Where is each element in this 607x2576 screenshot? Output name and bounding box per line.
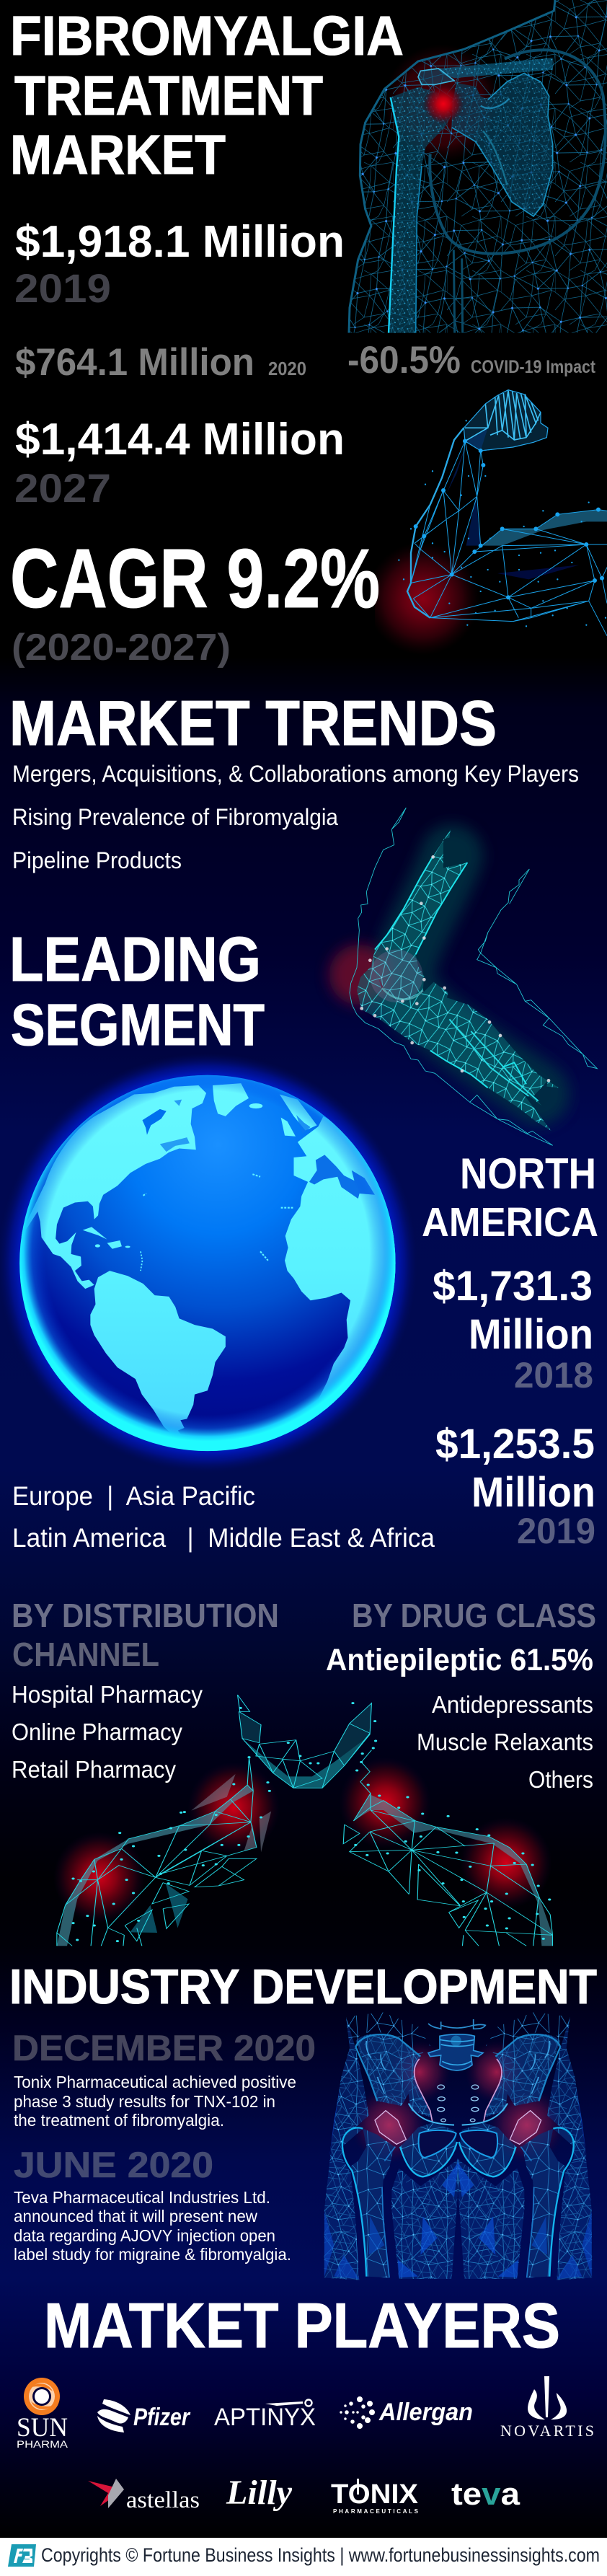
list: distribution channels: Online Pharmacy xyxy=(12,1719,182,1745)
stat: 2020 market size: 2020 xyxy=(268,358,306,379)
illustration: neck and shoulders mesh xyxy=(53,1695,552,1946)
logo: Tonix: PHARMACEUTICALS xyxy=(333,2508,419,2515)
event: December 2020: Tonix Pharmaceutical achieved positive xyxy=(14,2073,296,2091)
stat: 2019 market size: $1,918.1 Million xyxy=(15,217,345,267)
stat: COVID-19 impact: -60.5% xyxy=(347,339,461,381)
list: distribution channels: Hospital Pharmacy xyxy=(12,1681,203,1708)
illustration: shoulder mesh xyxy=(349,0,607,333)
logo: Astellas xyxy=(88,2479,200,2513)
illustration: pelvis mesh xyxy=(324,2012,592,2280)
stat: North America 2018 xyxy=(433,1263,593,1395)
list: distribution channels: Retail Pharmacy xyxy=(12,1756,176,1783)
event: December 2020: DECEMBER 2020 xyxy=(12,2028,316,2068)
region list: Latin America | Middle East & Africa xyxy=(12,1523,435,1553)
event: December 2020: the treatment of fibromyalgia. xyxy=(14,2111,224,2130)
stat: CAGR: (2020-2027) xyxy=(12,627,231,669)
title xyxy=(10,5,404,186)
logo: Sun Pharma: PHARMA xyxy=(17,2438,68,2450)
heading: market trends: MARKET TRENDS xyxy=(9,687,497,759)
stat: 2027 market size: 2027 xyxy=(14,465,111,511)
title: FIBROMYALGIA xyxy=(10,5,404,67)
title: MARKET xyxy=(10,124,226,186)
stat: antiepileptic share: Antiepileptic 61.5% xyxy=(326,1643,593,1677)
stat: CAGR xyxy=(10,531,380,669)
event: June 2020: label study for migraine & fibromyalgia. xyxy=(14,2245,291,2264)
stat: North America 2018: Million xyxy=(469,1311,593,1358)
logo: Teva: teva xyxy=(451,2476,520,2512)
stat: 2020 market size: $764.1 Million xyxy=(15,341,254,384)
illustration: flexed arm mesh xyxy=(366,390,607,655)
region list: Europe | Asia Pacific xyxy=(12,1481,255,1511)
list: drug classes: Antidepressants xyxy=(432,1691,593,1718)
logo: Pfizer xyxy=(97,2399,190,2432)
heading: leading segment: SEGMENT xyxy=(11,992,265,1058)
stat: 2019 market size: 2019 xyxy=(14,265,111,311)
logo: Lilly: Lilly xyxy=(226,2474,293,2512)
event: June 2020: Teva Pharmaceutical Industries Ltd. xyxy=(14,2188,270,2207)
stat: North America 2018: 2018 xyxy=(514,1355,593,1395)
list: market trends: Rising Prevalence of Fibromyalgia xyxy=(12,804,338,830)
footer logo xyxy=(8,2544,36,2567)
stat: North America 2019: 2019 xyxy=(517,1511,595,1551)
heading: leading segment xyxy=(9,925,265,1058)
logo: Tonix: TONIX xyxy=(331,2479,419,2510)
stat: CAGR: CAGR 9.2% xyxy=(10,531,380,625)
event: June 2020: announced that it will present new xyxy=(14,2207,257,2226)
stat: North America 2019: $1,253.5 xyxy=(435,1421,595,1468)
event: June 2020: JUNE 2020 xyxy=(14,2145,213,2185)
list: drug classes: Others xyxy=(528,1766,593,1793)
list: market trends: Mergers, Acquisitions, & Collaborations among Key Players xyxy=(12,761,579,787)
list: drug classes xyxy=(417,1691,593,1793)
stat: North America 2018: $1,731.3 xyxy=(433,1263,593,1310)
logo: Allergan: Allergan xyxy=(378,2399,473,2426)
heading: by distribution channel: BY DISTRIBUTION xyxy=(12,1597,279,1634)
logo: Pfizer: Pfizer xyxy=(133,2404,190,2431)
event: December 2020: phase 3 study results for TNX-102 in xyxy=(14,2092,275,2111)
logo: Novartis: NOVARTIS xyxy=(500,2422,594,2440)
heading: by distribution channel: CHANNEL xyxy=(12,1636,159,1673)
heading: market players: MATKET PLAYERS xyxy=(44,2290,560,2361)
stat: North America 2019 xyxy=(435,1421,595,1551)
logo: Aptinyx: APTINYX xyxy=(214,2404,316,2431)
logo: Novartis xyxy=(500,2376,594,2440)
logo: Allergan xyxy=(341,2399,473,2426)
illustration: globe xyxy=(0,1053,417,1473)
logo: Astellas: astellas xyxy=(126,2487,200,2513)
stat: 2027 market size: $1,414.4 Million xyxy=(15,415,345,464)
title: TREATMENT xyxy=(14,65,323,127)
footer bar xyxy=(0,2538,607,2576)
event: June 2020: data regarding AJOVY injection open xyxy=(14,2226,275,2245)
list: market trends: Pipeline Products xyxy=(12,847,182,873)
list: drug classes: Muscle Relaxants xyxy=(417,1729,593,1755)
stat: 2019 market size xyxy=(14,217,345,311)
stat: COVID-19 impact xyxy=(347,339,596,381)
stat: North America 2019: Million xyxy=(471,1469,595,1516)
event: June 2020 xyxy=(14,2145,291,2264)
list: market trends xyxy=(12,761,579,873)
region list xyxy=(12,1481,435,1553)
heading: leading segment: LEADING xyxy=(9,925,261,994)
event: December 2020 xyxy=(12,2028,316,2130)
illustration: elbow mesh xyxy=(329,808,597,1145)
heading: North America xyxy=(422,1150,598,1245)
logo: Sun Pharma: SUN xyxy=(17,2413,68,2443)
heading: by distribution channel xyxy=(12,1597,279,1673)
stat: 2027 market size xyxy=(14,415,345,511)
logo: Sun Pharma xyxy=(17,2378,68,2450)
list: distribution channels xyxy=(12,1681,203,1783)
